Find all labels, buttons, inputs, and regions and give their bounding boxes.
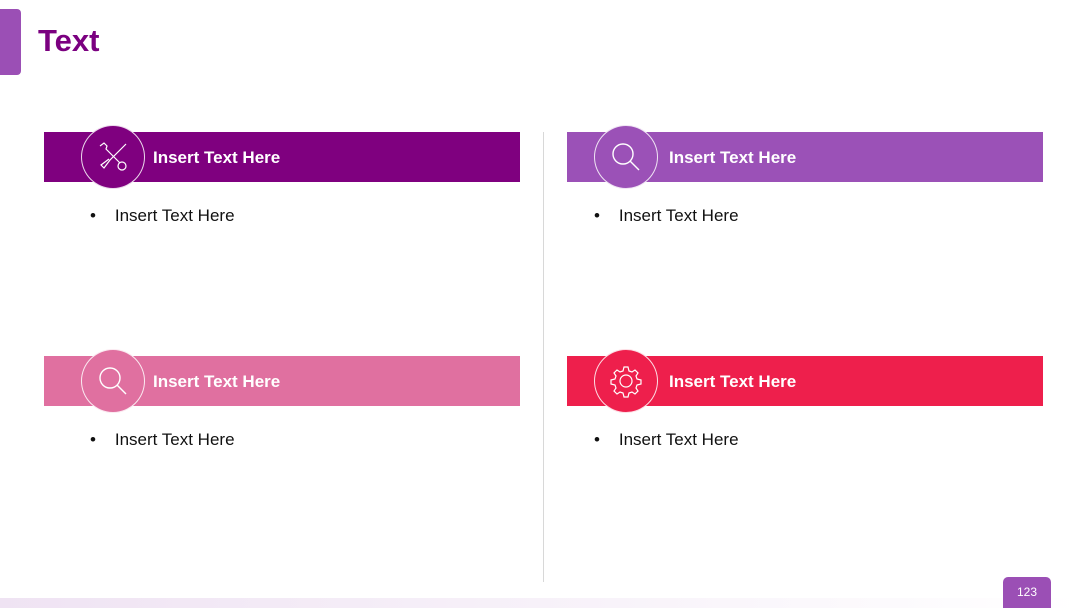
icon: gear — [610, 366, 642, 398]
page number — [1003, 577, 1051, 608]
header bar — [567, 132, 1043, 182]
icon: tools — [100, 142, 127, 171]
header bar: Insert Text Here — [153, 148, 280, 167]
header bar: Insert Text Here — [669, 372, 796, 391]
header bar — [44, 356, 520, 406]
header bar — [567, 356, 1043, 406]
divider — [543, 132, 544, 582]
icon: magnifier — [612, 143, 640, 170]
title tab — [0, 9, 21, 75]
panel: bottom-right — [567, 349, 1043, 449]
bullet text: • Insert Text Here — [594, 206, 739, 225]
footer strip — [0, 598, 1080, 608]
panel: top-left — [44, 125, 520, 225]
header bar — [44, 132, 520, 182]
panel: bottom-left — [44, 349, 520, 449]
bullet text: • Insert Text Here — [594, 430, 739, 449]
bullet text: • Insert Text Here — [90, 206, 235, 225]
icon: magnifier — [99, 367, 126, 394]
bullet text: • Insert Text Here — [90, 430, 235, 449]
page number: 123 — [1017, 585, 1037, 599]
panel: top-right — [567, 125, 1043, 225]
header bar: Insert Text Here — [669, 148, 796, 167]
header bar: Insert Text Here — [153, 372, 280, 391]
title: Text — [38, 23, 99, 58]
